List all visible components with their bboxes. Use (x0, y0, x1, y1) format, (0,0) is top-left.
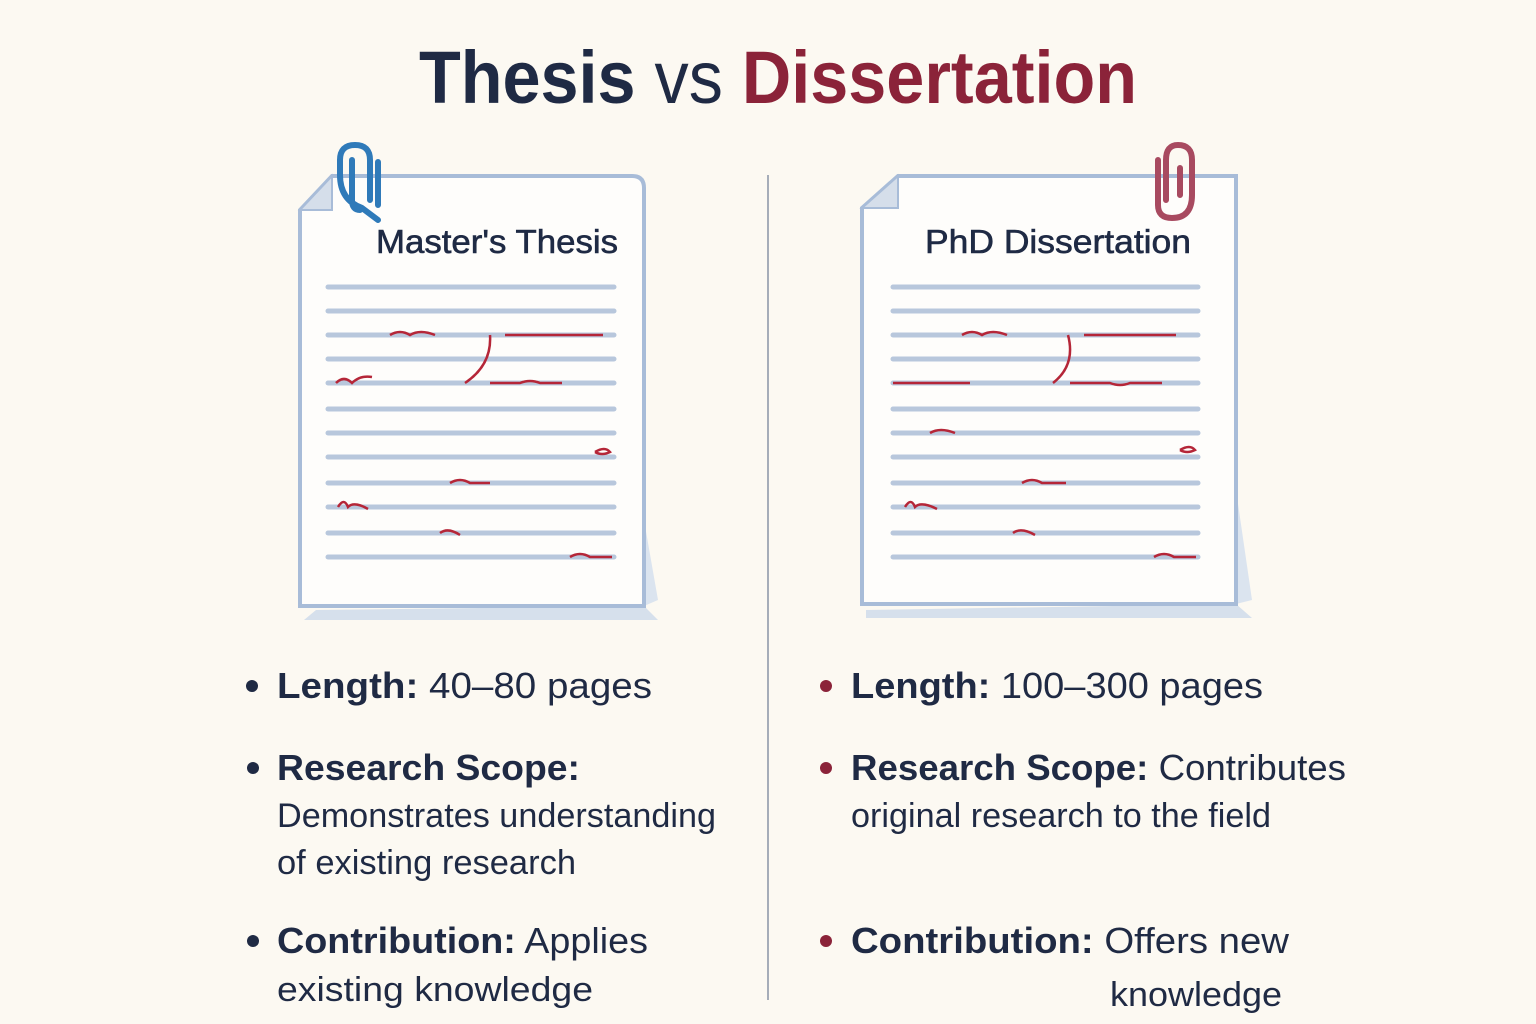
title: Thesis vs Dissertation (419, 36, 1137, 119)
bullets: master's thesis (246, 665, 716, 1009)
bullets: master's thesis: existing knowledge (277, 971, 593, 1009)
heading: Master's Thesis: Master's Thesis (376, 223, 618, 260)
bullets: master's thesis: Contribution: Applies (277, 920, 648, 961)
bullets: PhD dissertation: Contribution: Offers new (851, 920, 1290, 961)
bullets: PhD dissertation: original research to the field (851, 797, 1271, 835)
document: PhD dissertation (862, 145, 1252, 618)
document: master's thesis (300, 145, 658, 620)
bullets: PhD dissertation (820, 665, 1346, 1014)
icon: blue paperclip (340, 145, 378, 220)
bullets: master's thesis: Length: 40–80 pages (277, 665, 652, 706)
heading: PhD Dissertation: PhD Dissertation (925, 223, 1191, 260)
bullets: PhD dissertation: Length: 100–300 pages (851, 665, 1263, 706)
bullets: PhD dissertation: knowledge (1110, 976, 1282, 1014)
bullets: master's thesis: of existing research (277, 844, 576, 882)
icon: red paperclip (1158, 145, 1192, 218)
bullets: master's thesis: Research Scope: (277, 747, 580, 788)
bullets: PhD dissertation: Research Scope: Contributes (851, 747, 1346, 788)
bullets: master's thesis: Demonstrates understanding (277, 797, 716, 835)
